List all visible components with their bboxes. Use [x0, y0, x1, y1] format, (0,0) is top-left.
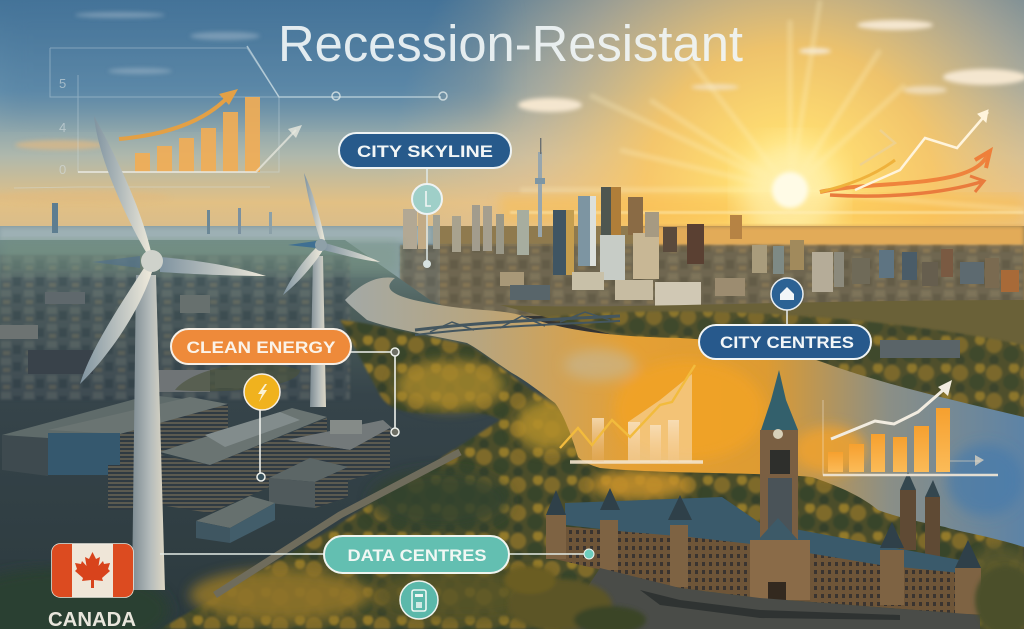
- chart overlay: upper-left growth chart: 0: [59, 162, 66, 177]
- label: data centres: [160, 536, 594, 619]
- label: city centres: [699, 278, 871, 359]
- central clock tower: [750, 370, 810, 600]
- label: data centres: DATA CENTRES: [348, 546, 486, 565]
- far bank trees: [540, 311, 1024, 425]
- large wind turbine: [80, 116, 266, 590]
- icon: flag: [52, 544, 133, 597]
- side pavilions: [546, 515, 981, 614]
- left suburban texture: [0, 255, 350, 400]
- chart overlay: upper-left growth chart: 4: [59, 120, 66, 135]
- building: low block: [196, 496, 275, 543]
- chart overlay: river chart left: [560, 365, 703, 462]
- roof: [565, 497, 960, 577]
- facade: [546, 525, 980, 615]
- title: Recession-Resistant: [278, 15, 743, 72]
- office campus: [2, 395, 392, 543]
- building: central office: [108, 408, 327, 513]
- chart overlay: upper-left growth chart: 5: [59, 76, 66, 91]
- label: city skyline: [339, 133, 511, 268]
- icon: skyline badge: [412, 184, 442, 214]
- label: city skyline: CITY SKYLINE: [357, 142, 493, 161]
- chart overlay: upper-left growth chart: [14, 46, 447, 188]
- bridge: [415, 312, 620, 335]
- parliament grounds: [504, 566, 1024, 629]
- arrows beside the sun: [820, 110, 990, 196]
- parliament building: [546, 370, 981, 615]
- foreground trees: [160, 320, 1024, 629]
- icon: data device: [400, 581, 438, 619]
- clouds: [0, 12, 1024, 203]
- sun reflection on water: [564, 349, 1023, 516]
- badge: Canada flag: [48, 544, 136, 629]
- distant haze and skyline: [0, 138, 1024, 316]
- label: clean energy: CLEAN ENERGY: [186, 338, 336, 357]
- sky background: [0, 0, 1024, 300]
- bottom left trees: [0, 568, 170, 629]
- sun with rays: [510, 0, 1024, 242]
- chart overlay: river chart right: [823, 380, 998, 475]
- building: small block: [269, 458, 348, 508]
- back towers: [900, 472, 940, 557]
- building: left office: [2, 395, 228, 476]
- left land base: [0, 240, 640, 629]
- right bank land: [500, 300, 1024, 425]
- label: city centres: CITY CENTRES: [720, 333, 854, 352]
- building: right office: [287, 420, 392, 480]
- small wind turbine: [283, 173, 380, 407]
- icon: home badge: [771, 278, 803, 310]
- river: [345, 277, 1024, 547]
- highway: [215, 452, 460, 595]
- icon: lightning bolt: [244, 374, 280, 410]
- label: clean energy: [171, 329, 399, 481]
- left suburban blocks: [0, 292, 300, 392]
